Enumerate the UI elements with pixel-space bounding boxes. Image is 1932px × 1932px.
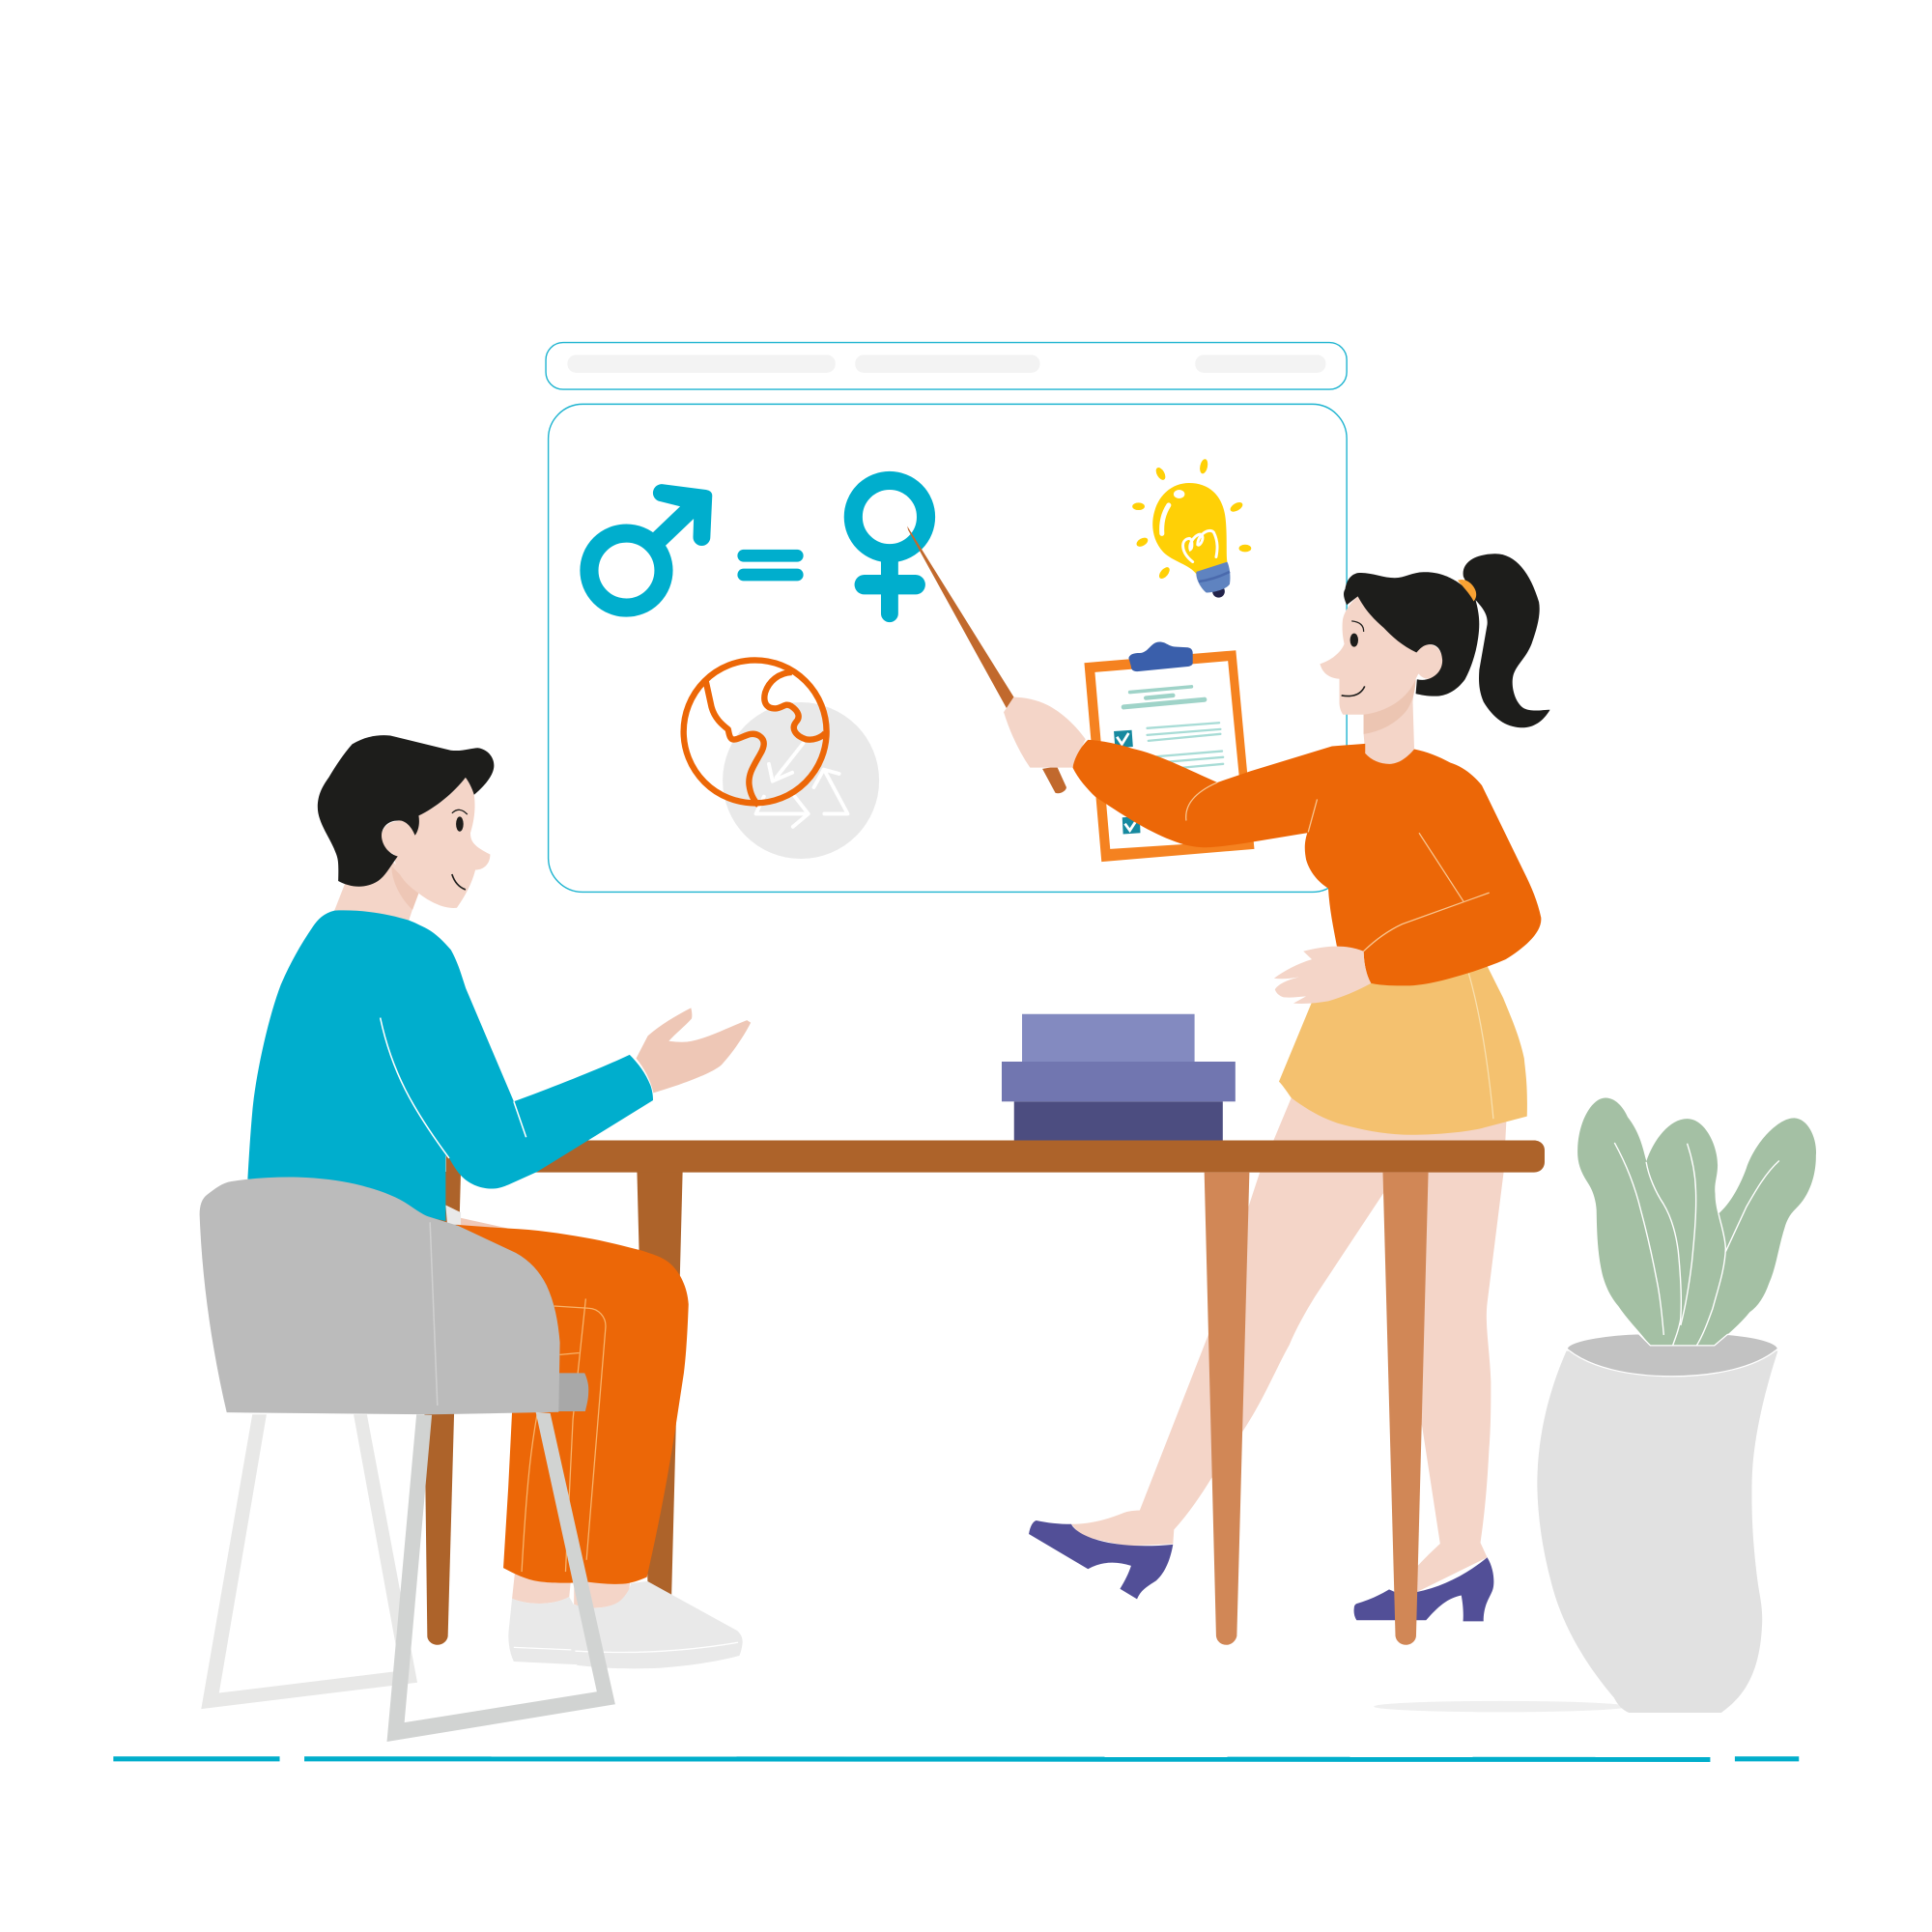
clipboard checkboxes [1114, 730, 1140, 835]
pointer stick [907, 526, 1066, 793]
presentation board [549, 404, 1347, 892]
chair: shell [200, 1178, 560, 1414]
books [1002, 1014, 1236, 1141]
man: hair [318, 735, 494, 887]
woman: skirt [1279, 966, 1527, 1135]
table: back left leg [421, 1172, 461, 1645]
man: eye [456, 816, 464, 832]
man: thigh skin [458, 1217, 508, 1230]
chair: back legs [201, 1414, 417, 1709]
table: top [446, 1140, 1545, 1173]
icon: equals sign [737, 550, 804, 581]
table: front legs [1205, 1173, 1429, 1645]
man: shirt hem [445, 1205, 461, 1225]
woman: hair band [1458, 580, 1476, 601]
pot shadow [1374, 1701, 1628, 1712]
woman: left shoe [1029, 1520, 1173, 1599]
plant: leaves [1577, 1097, 1816, 1346]
man: shoes [508, 1581, 743, 1668]
ground line [113, 1757, 1799, 1761]
icon: female symbol [853, 480, 926, 613]
clipboard text lines [1123, 687, 1223, 768]
chair: front legs [387, 1412, 615, 1742]
icon: male symbol [589, 484, 712, 608]
woman: eye [1350, 634, 1358, 647]
chair: armrest [558, 1373, 588, 1411]
man: sweater [247, 910, 653, 1221]
woman: legs [1071, 1084, 1507, 1592]
clipboard [1084, 642, 1254, 862]
woman: resting hand [1274, 947, 1371, 1004]
woman: sweater [1072, 740, 1541, 985]
man: hand [637, 1008, 751, 1093]
icon: globe with recycling symbol [684, 660, 879, 859]
woman: neck and face [1320, 596, 1443, 764]
woman: ponytail [1463, 554, 1550, 727]
woman: pointing hand [1004, 697, 1086, 768]
plant: pot rim [1567, 1334, 1778, 1377]
man: trousers [457, 1225, 689, 1584]
woman: right shoe [1354, 1557, 1493, 1621]
table: back right leg [637, 1172, 683, 1596]
man: face [382, 778, 490, 908]
man: neck [334, 860, 418, 921]
clipboard clip [1128, 642, 1193, 671]
man: ankles [512, 1571, 631, 1607]
icon: light bulb [1132, 458, 1251, 598]
plant: pot [1537, 1334, 1778, 1713]
browser address bar [546, 343, 1347, 389]
woman: hair [1344, 572, 1479, 696]
